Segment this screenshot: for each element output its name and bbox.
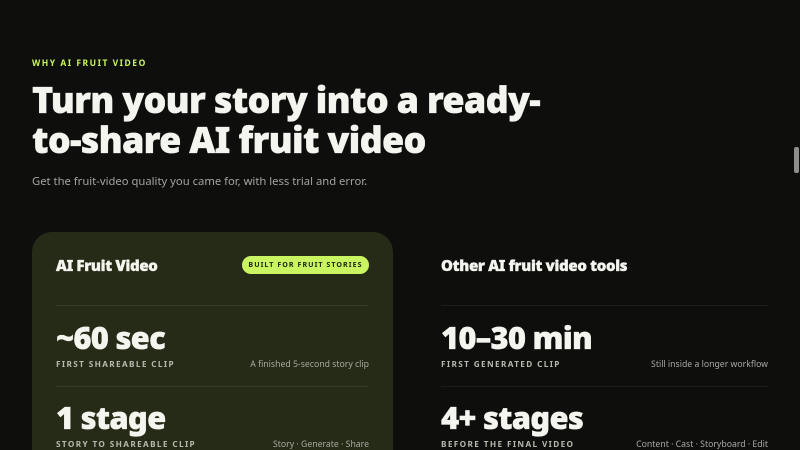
scrollbar thumb [794,147,799,173]
metric value: ~60 sec [56,317,165,359]
panel: Other AI fruit video tools [441,256,768,450]
metric label: STORY TO SHAREABLE CLIP [56,439,196,450]
panel: AI Fruit Video [32,232,393,450]
metric value: 4+ stages [441,397,583,439]
title [32,75,540,164]
metric value: 10–30 min [441,317,592,359]
title: to-share AI fruit video [32,115,426,164]
metric note: Still inside a longer workflow [651,358,768,370]
panel heading: AI Fruit Video [56,256,158,276]
subtitle: Get the fruit-video quality you came for, with less trial and error. [32,174,367,189]
panel heading: Other AI fruit video tools [441,256,627,276]
eyebrow: WHY AI FRUIT VIDEO [32,58,147,69]
metric note: Story · Generate · Share [273,438,369,450]
title: Turn your story into a ready- [32,75,540,124]
badge: BUILT FOR FRUIT STORIES [248,260,363,270]
metric label: BEFORE THE FINAL VIDEO [441,439,574,450]
metric label: FIRST GENERATED CLIP [441,359,561,370]
metric note: A finished 5-second story clip [250,358,369,370]
badge [242,256,369,274]
metric value: 1 stage [56,397,165,439]
metric note: Content · Cast · Storyboard · Edit [636,438,768,450]
metric label: FIRST SHAREABLE CLIP [56,359,175,370]
